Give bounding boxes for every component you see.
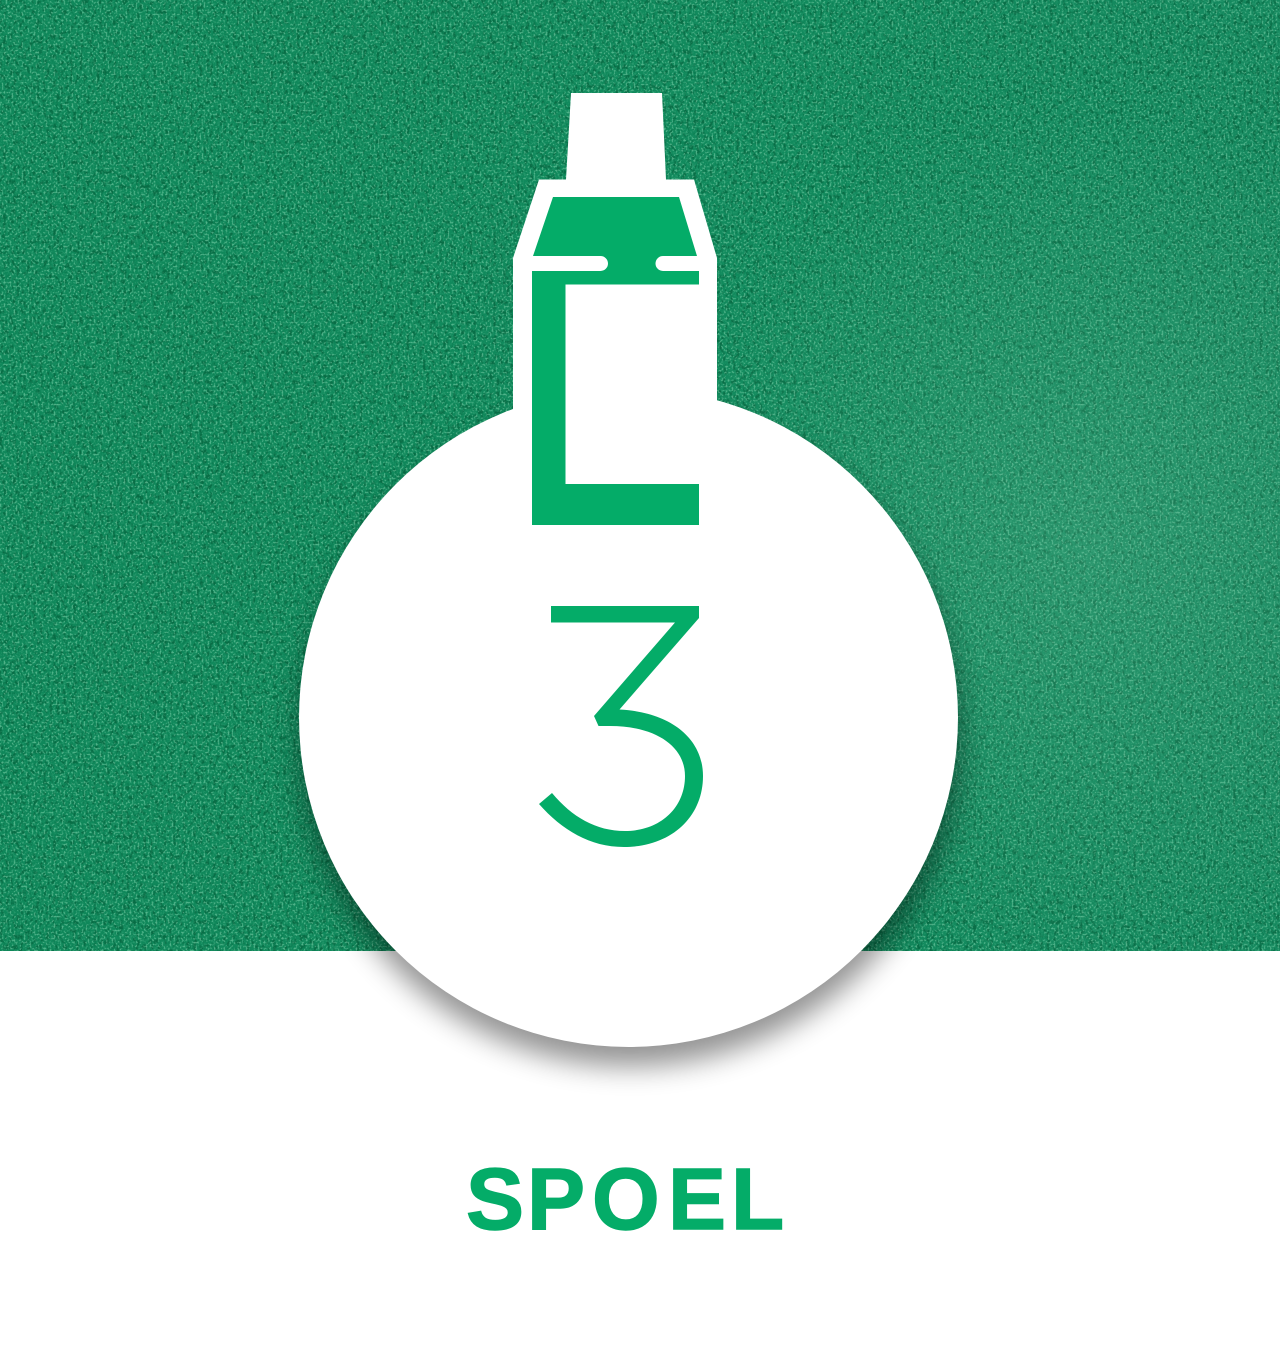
- heading: SPOEL: SPOEL: [466, 1151, 784, 1248]
- white circle with bottle silhouette: [299, 93, 958, 1047]
- step number 3: [539, 606, 703, 847]
- textured green background: [0, 0, 1280, 951]
- circle drop shadow: [300, 408, 960, 1066]
- icon: bottle: [532, 197, 699, 525]
